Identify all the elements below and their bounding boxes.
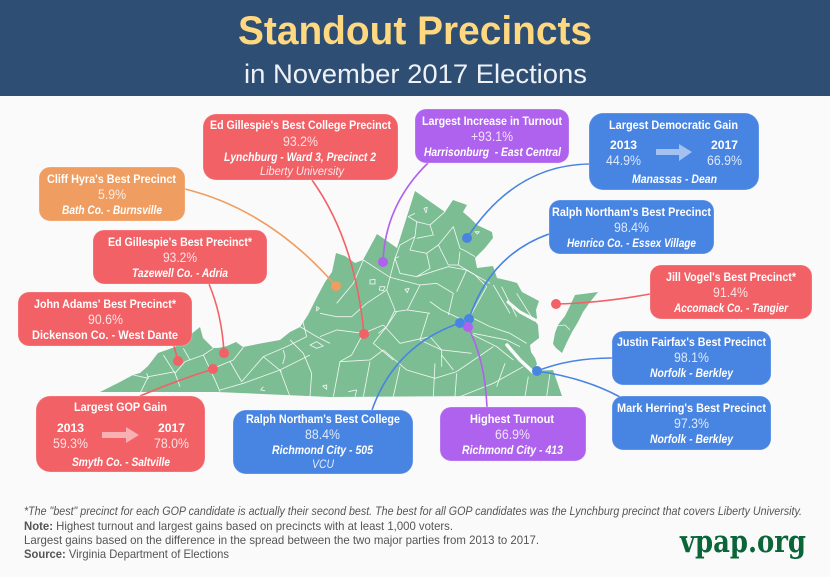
connector: highest turnout [463, 322, 487, 407]
callout: Justin Fairfax's best precinct: Norfolk - Berkley [650, 366, 734, 380]
callout: Justin Fairfax's best precinct: 98.1% [674, 350, 709, 365]
callout: Ed Gillespie's best college precinct: Ed Gillespie's Best College Precinct [210, 118, 391, 132]
county lines, west [133, 297, 330, 397]
callout: Ed Gillespie's best precinct [93, 230, 267, 284]
footnotes: Source: Virginia Department of Elections [24, 547, 229, 561]
callout: Cliff Hyra's best precinct [39, 167, 185, 221]
callout: largest Democratic gain [589, 113, 759, 190]
footnotes: Note: Highest turnout and largest gains based on precincts with at least 1,000 voters. [24, 519, 453, 533]
callout: John Adams' best precinct: John Adams' Best Precinct* [34, 297, 176, 311]
callout: largest GOP gain: 2017 [158, 421, 185, 435]
callout: Cliff Hyra's best precinct: Bath Co. - Burnsville [62, 203, 162, 217]
callout: Ralph Northam's best college [233, 410, 413, 474]
Rappahannock, York and James river inlets [507, 302, 535, 372]
arrow [656, 144, 692, 161]
connector: Cliff Hyra [185, 189, 341, 291]
callout: John Adams' best precinct [18, 292, 192, 346]
connector: Ed Gillespie college [312, 180, 369, 339]
callout: Ed Gillespie's best precinct: 93.2% [163, 250, 197, 265]
connector: John Adams [173, 346, 183, 366]
callout: largest increase in turnout: Harrisonburg - East Central [424, 145, 562, 159]
callout: Ralph Northam's best college: Ralph Northam's Best College [246, 412, 400, 426]
connector: Northam best precinct [464, 234, 549, 324]
callout: Cliff Hyra's best precinct: 5.9% [98, 187, 126, 202]
callout: Ed Gillespie's best college precinct [203, 114, 398, 180]
callout: largest GOP gain: 78.0% [154, 436, 189, 451]
callout: Ed Gillespie's best precinct: Ed Gillespie's Best Precinct* [108, 235, 252, 249]
callout: Ralph Northam's best college: 88.4% [305, 427, 340, 442]
connector: Mark Herring [532, 366, 620, 397]
header banner [0, 0, 830, 96]
callout: largest Democratic gain: Largest Democratic Gain [609, 118, 738, 132]
callout: highest turnout [440, 407, 586, 461]
logo: vpap.org: vpap.org [679, 524, 806, 560]
callout: largest Democratic gain: 2017 [711, 138, 738, 152]
callout: Jill Vogel's best precinct [650, 265, 812, 319]
connector: largest increase in turnout [378, 163, 428, 267]
callout: Ralph Northam's best precinct: 98.4% [614, 220, 649, 235]
callout: Ralph Northam's best precinct: Henrico Co. - Essex Village [567, 236, 696, 250]
callout: largest GOP gain: Largest GOP Gain [74, 400, 167, 414]
callout: Justin Fairfax's best precinct: Justin Fairfax's Best Precinct [617, 335, 766, 349]
callout: John Adams' best precinct: 90.6% [88, 312, 123, 327]
title: Standout Precincts [238, 9, 592, 53]
callout: Ralph Northam's best precinct: Ralph Northam's Best Precinct [552, 205, 711, 219]
callout: Cliff Hyra's best precinct: Cliff Hyra's Best Precinct [47, 172, 176, 186]
callout: Jill Vogel's best precinct: Jill Vogel's Best Precinct* [666, 270, 796, 284]
callout: largest Democratic gain: 66.9% [707, 153, 742, 168]
callout: largest GOP gain: Smyth Co. - Saltville [72, 455, 170, 469]
callout: Ed Gillespie's best college precinct: Lynchburg - Ward 3, Precinct 2 [224, 150, 376, 164]
callout: Ed Gillespie's best precinct: Tazewell Co. - Adria [132, 266, 228, 280]
connector: Justin Fairfax [537, 358, 612, 371]
callout: largest increase in turnout: Largest Increase in Turnout [422, 114, 562, 128]
callout: largest Democratic gain: Manassas - Dean [632, 172, 717, 186]
county lines, centre and east [320, 207, 550, 397]
callout: Jill Vogel's best precinct: 91.4% [713, 285, 748, 300]
callout: largest GOP gain: 2013 [57, 421, 84, 435]
callout: Justin Fairfax's best precinct [612, 331, 771, 385]
footnotes: Largest gains based on the difference in the spread between the two major parties from 2013 to 2017. [24, 533, 539, 547]
callout: largest GOP gain: 59.3% [53, 436, 88, 451]
callout: Mark Herring's best precinct: Norfolk - Berkley [650, 432, 734, 446]
subtitle: in November 2017 Elections [244, 59, 587, 89]
callout: Ralph Northam's best precinct [549, 200, 714, 254]
connector: Northam best college [372, 318, 465, 410]
connector: Jill Vogel [551, 294, 650, 309]
callout: John Adams' best precinct: Dickenson Co. - West Dante [32, 328, 178, 342]
arrow [102, 427, 139, 443]
footnotes [24, 504, 802, 561]
connector: largest GOP gain [140, 364, 218, 396]
callout: largest increase in turnout: +93.1% [471, 129, 513, 144]
callout: Mark Herring's best precinct [612, 396, 771, 450]
eastern shore [553, 292, 598, 353]
callout: highest turnout: 66.9% [495, 427, 530, 442]
map of Virginia precincts [100, 191, 598, 397]
callout: largest Democratic gain: 44.9% [606, 153, 641, 168]
callout: Mark Herring's best precinct: 97.3% [674, 416, 709, 431]
callout: highest turnout: Richmond City - 413 [462, 443, 563, 457]
connector: largest Democratic gain [462, 164, 589, 243]
callout: Mark Herring's best precinct: Mark Herring's Best Precinct [617, 401, 766, 415]
eastern shore county line [556, 325, 570, 330]
callout: largest increase in turnout [415, 109, 569, 163]
callout: Ralph Northam's best college: Richmond City - 505 [272, 443, 373, 457]
callout: Ed Gillespie's best college precinct: Liberty University [260, 164, 345, 178]
callout: Jill Vogel's best precinct: Accomack Co. - Tangier [673, 301, 789, 315]
callout: largest GOP gain [36, 396, 205, 472]
callout: Ed Gillespie's best college precinct: 93.2% [283, 134, 318, 149]
connector: Ed Gillespie best [209, 284, 229, 358]
callout: highest turnout: Highest Turnout [470, 412, 554, 426]
callout: largest Democratic gain: 2013 [610, 138, 637, 152]
callout: Ralph Northam's best college: VCU [312, 457, 334, 471]
